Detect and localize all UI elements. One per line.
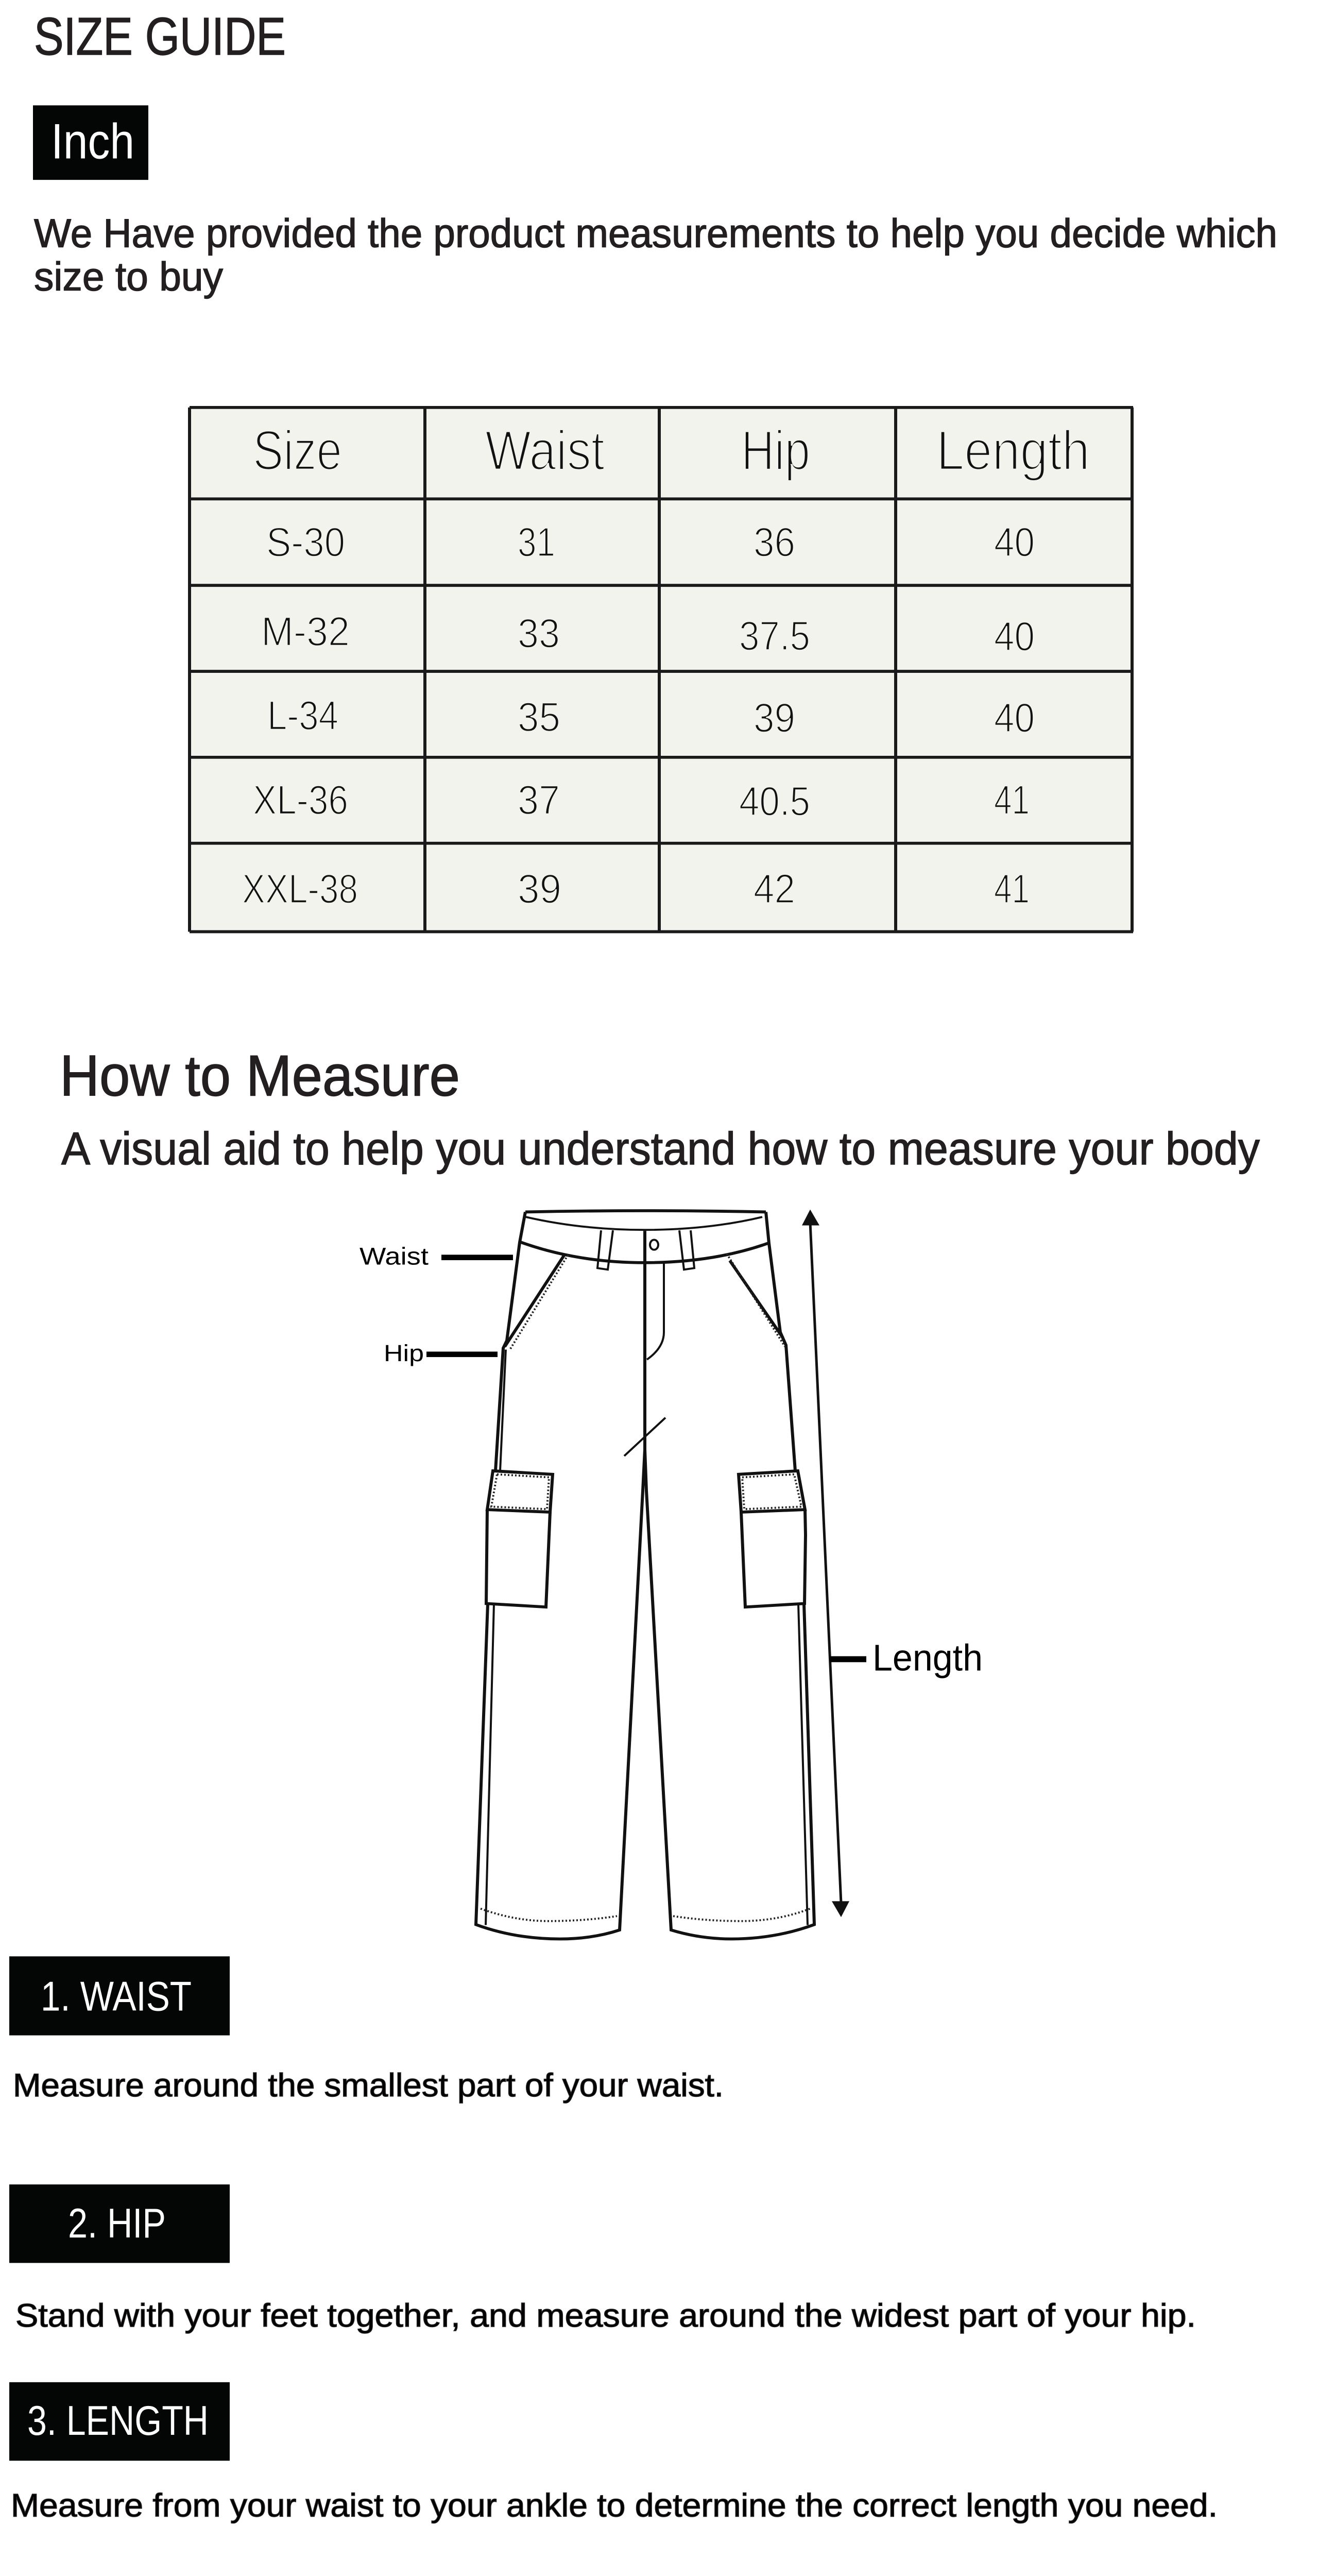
- section badge: length: [9, 2382, 230, 2461]
- row: XXL-38: 39: [518, 866, 561, 912]
- table header row: Length: [936, 419, 1090, 482]
- row: XXL-38: XXL-38: [242, 866, 358, 912]
- waist label: Waist: [360, 1243, 429, 1270]
- hip label: Hip: [384, 1340, 424, 1366]
- table header row: Size: [253, 419, 342, 482]
- row: M-32: 33: [518, 611, 560, 656]
- row: L-34: L-34: [267, 692, 338, 739]
- row: XL-36: 37: [518, 777, 560, 823]
- table header row: [253, 419, 1090, 482]
- right cargo pocket: [739, 1471, 806, 1607]
- row: L-34: [267, 692, 1035, 741]
- left cargo pocket: [486, 1471, 553, 1607]
- unit badge: inch: Inch: [51, 113, 134, 169]
- row: L-34: 40: [994, 695, 1035, 741]
- row: XXL-38: [242, 866, 1030, 912]
- row: XL-36: 41: [994, 777, 1030, 823]
- table header row: Waist: [485, 419, 605, 482]
- intro text: [34, 211, 1277, 299]
- waistband: [520, 1211, 768, 1263]
- hip instruction: Stand with your feet together, and measure around the widest part of your hip.: [15, 2297, 1196, 2334]
- row: M-32: 40: [994, 614, 1035, 659]
- row: M-32: 37.5: [739, 613, 810, 659]
- row: XXL-38: 42: [754, 866, 795, 912]
- row: XL-36: [253, 777, 1030, 824]
- row: S-30: 31: [518, 519, 555, 565]
- waist label: [360, 1243, 513, 1270]
- length arrow: [802, 1210, 849, 1917]
- section badge: hip: [9, 2184, 230, 2263]
- hip label: [384, 1340, 498, 1366]
- length label: [830, 1637, 983, 1679]
- section badge: hip: 2. HIP: [68, 2200, 166, 2247]
- center seam and fly: [624, 1231, 665, 1456]
- pants diagram: [476, 1211, 814, 1939]
- intro text: We Have provided the product measurements to help you decide which: [34, 211, 1277, 256]
- heading: how to measure: How to Measure: [60, 1044, 460, 1108]
- side seams and legs: [476, 1212, 814, 1939]
- section badge: waist: 1. WAIST: [41, 1973, 192, 2020]
- subheading: visual aid: A visual aid to help you understand how to measure your body: [61, 1123, 1260, 1174]
- row: M-32: [261, 608, 1035, 659]
- row: XL-36: 40.5: [739, 778, 810, 824]
- row: S-30: 36: [754, 519, 795, 565]
- row: L-34: 35: [518, 694, 560, 740]
- waist instruction: Measure around the smallest part of your waist.: [13, 2067, 724, 2104]
- row: M-32: M-32: [261, 608, 350, 655]
- front pockets: [505, 1253, 785, 1350]
- length instruction: Measure from your waist to your ankle to determine the correct length you need.: [11, 2487, 1218, 2523]
- title: size guide: SIZE GUIDE: [34, 7, 286, 66]
- row: S-30: [266, 519, 1035, 565]
- row: S-30: 40: [994, 519, 1035, 565]
- row: S-30: S-30: [266, 519, 345, 565]
- table header row: Hip: [741, 419, 810, 482]
- length label: Length: [872, 1637, 983, 1679]
- section badge: length: 3. LENGTH: [27, 2397, 209, 2444]
- size table: [190, 408, 1133, 931]
- section badge: waist: [9, 1956, 230, 2036]
- row: XL-36: XL-36: [253, 777, 348, 823]
- row: L-34: 39: [754, 695, 795, 741]
- intro text: size to buy: [34, 254, 223, 299]
- row: XXL-38: 41: [994, 866, 1030, 912]
- unit badge: inch: [33, 105, 148, 180]
- belt loops and button: [597, 1230, 694, 1269]
